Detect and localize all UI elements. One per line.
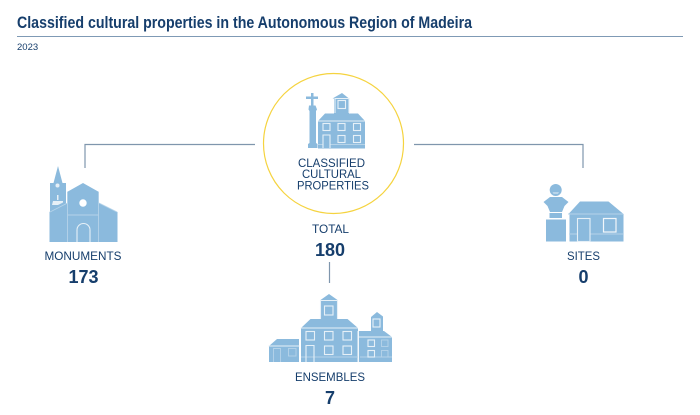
value: monuments: 173 [68,267,99,287]
year subtitle: 2023 [17,42,38,53]
total label: TOTAL [312,222,349,236]
icon: monuments church [50,166,118,242]
connector: sites [414,144,583,168]
label: classified cultural properties: PROPERTIES [297,178,369,192]
label: sites: SITES [567,249,600,263]
value: sites: 0 [578,267,589,287]
label: classified cultural properties: CULTURAL [302,167,361,181]
icon: sites bust and house [544,184,624,242]
label: classified cultural properties [297,156,369,192]
label: ensembles: ENSEMBLES [295,370,365,384]
total value: 180 [315,240,345,260]
connector: ensembles [328,262,330,283]
connector: monuments [85,144,255,168]
icon: ensembles buildings [268,294,392,362]
title: Classified cultural properties in the Autonomous Region of Madeira [17,14,473,32]
central circle [264,74,404,214]
value: ensembles: 7 [325,388,335,408]
label: classified cultural properties: CLASSIFIED [298,156,365,170]
icon: classified cultural properties [306,93,365,148]
label: monuments: MONUMENTS [44,249,122,263]
